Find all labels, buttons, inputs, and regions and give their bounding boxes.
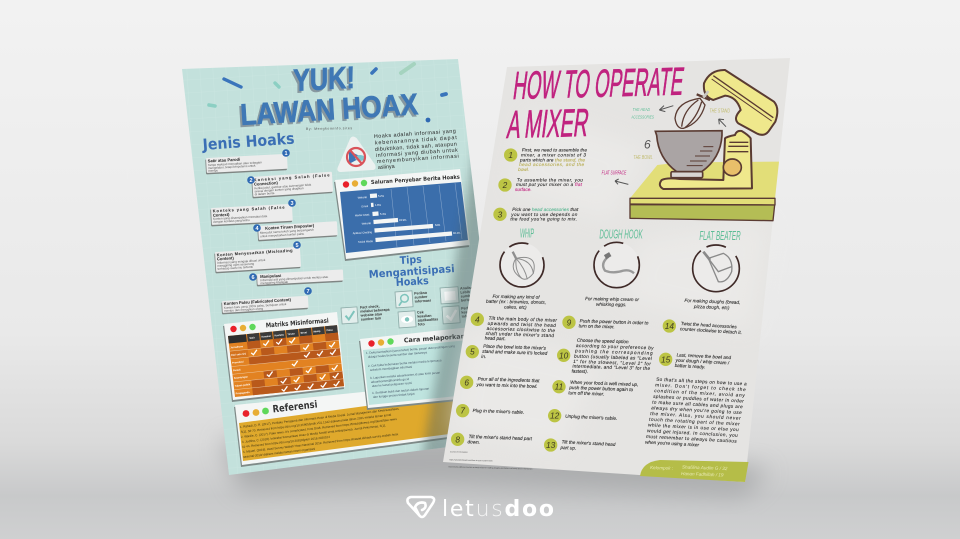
text: definition of hoax: kebenarannya tidak dapat <box>375 135 457 146</box>
tip: check: keaslian <box>461 310 476 315</box>
step 15: 15 <box>661 354 671 364</box>
conclusion text: touch the rotating part of the mixer <box>649 417 741 426</box>
conclusion text: condition of the mixer, avoid any <box>654 388 746 398</box>
step 4: upwards and twist the head <box>487 321 557 328</box>
card 1: Satir atau Parodi: mengelabui, tetapi berpotensi untuk <box>208 164 256 170</box>
wordmark: letusdoo <box>442 497 554 522</box>
text: definition of hoax: Hoaks adalah informasi yang <box>374 129 456 140</box>
step 11: push the power button again to <box>569 385 634 392</box>
group credit banner: Shafilina Audiin G / 32 <box>682 465 728 471</box>
card 5: Konten Menyesatkan: Content) <box>217 255 235 261</box>
step 15: batter is ready. <box>674 363 706 369</box>
matrix table <box>228 325 344 397</box>
conclusion text: must remember to always be cautious <box>646 434 738 444</box>
step 13: 13 <box>546 440 556 450</box>
step 9 <box>562 316 649 330</box>
step 10: 10 <box>559 350 569 360</box>
badge 3 <box>288 199 296 207</box>
text: definition of hoax: informasi yang diubah untuk <box>376 148 458 159</box>
step 8: Tilt the mixer's stand head part <box>468 434 533 441</box>
step 10: according to your preference by <box>576 343 655 350</box>
card 2: Koneksi yang Salah: Koneksi yang Salah (False <box>254 172 330 182</box>
bar chart: Media Cetak <box>355 212 370 217</box>
conclusion text: while the mixer is in use or else you <box>648 422 740 432</box>
card 5: Konten Menyesatkan: Informasi yang sengaja dibuat untuk <box>217 258 266 265</box>
step 3: Pick one head accessories that <box>512 207 579 212</box>
labels and arrows: FLAT SURFACE <box>602 171 627 177</box>
conclusion text: splashes or puddles of water in order <box>653 394 745 404</box>
accessory headings: DOUGH HOOK <box>599 227 643 242</box>
labels and arrows: THE BOWL <box>633 155 653 161</box>
heading: Tips Mengantisipasi Hoaks: Tips <box>399 254 422 267</box>
steps box: atau ke kanal pelaporan resmi <box>372 381 412 388</box>
captions: pizza dough, etc) <box>693 304 730 310</box>
title: How to Operate a Mixer: A MIXER <box>505 101 592 147</box>
card 2: Koneksi yang Salah <box>251 172 333 198</box>
tip: analisa: Lebih dari <box>460 289 478 295</box>
card 2: Koneksi yang Salah: Ketika judul, gambar atau keterangan tidak <box>254 183 312 190</box>
card 4: Konten Tiruan: Mencatut nama tokoh yang berpengaruh <box>260 228 314 235</box>
step 13: Tilt the mixer's stand head <box>561 439 616 447</box>
card 2: Koneksi yang Salah: di dalam berita <box>255 191 275 196</box>
title: Yuk! Lawan Hoax <box>237 60 419 134</box>
step 3 <box>493 207 579 222</box>
panel: Saluran Penyebar Berita Hoaks <box>334 169 470 261</box>
icon: whip <box>500 243 544 287</box>
captions: whisking eggs. <box>596 302 627 307</box>
tip: check: informasi <box>462 314 478 319</box>
card 2: Koneksi yang Salah: Connection) <box>254 180 279 187</box>
tip: cek keaslian: alat/kualitas <box>418 317 438 323</box>
text: definition of hoax: aslinya <box>378 164 395 171</box>
illustration: stand mixer <box>602 70 779 221</box>
matrix table: Manip <box>313 330 321 333</box>
step 4: shaft under the mixer's stand <box>485 331 555 338</box>
step 15 <box>659 352 732 371</box>
tip: periksa sumber: informasi <box>415 299 431 304</box>
step 4: 4 <box>475 314 480 324</box>
tip: check: Perhatikan <box>461 305 480 311</box>
group credit banner: Kelompok : <box>650 465 674 471</box>
step 3: you want to use depends on <box>511 212 578 217</box>
text: definition of hoax: dibuktikan, tidak sah, ataupun <box>375 142 457 153</box>
bar chart: 92.4% <box>453 231 461 235</box>
conclusion text: would get injured. In conclusion, you <box>647 428 739 438</box>
steps box: 1. Dokumentasikan (screenshot) berita, pesan atau postingan yang <box>366 344 455 355</box>
sources: https://www.wikihow.com/use-a-stand-mixer-for-making-doughs-and-batters-at-home-and-in-the-kitchen <box>449 465 532 471</box>
card 5: Konten Menyesatkan: terhadap suatu isu tertentu <box>217 265 254 271</box>
references list: 4. Mastel. (2019). Hasil Survey Wabah Hoax Nasional 2019. Retrieved from https://mastel.id/hasil-survey-wabah-hoax <box>243 432 399 454</box>
conclusion text: when you're using a mixer <box>645 440 700 447</box>
text: definition of hoax: menyembunyikan informasi <box>377 154 459 165</box>
card 6: Manipulasi: menggiring khalayak <box>260 280 289 285</box>
badge 2: 2 <box>249 178 253 184</box>
steps box: dan tunggu proses tindak lanjut <box>373 392 415 399</box>
title: Yuk! Lawan Hoax: YUK! <box>293 60 355 98</box>
text: definition of hoax <box>374 129 459 171</box>
step 5: stand and make sure it's locked <box>482 349 548 356</box>
step 6: Pour all of the ingredients that <box>477 376 541 383</box>
step 10: pushing the corresponding <box>575 348 654 356</box>
bar chart: Email <box>361 204 368 208</box>
bar chart: Aplikasi Chatting <box>353 230 373 235</box>
card 1: Satir atau Parodi: Tanpa maksud merugikan atau sebagian <box>208 160 262 167</box>
card 4: Konten Tiruan: Konten Tiruan (Impostor) <box>265 223 315 231</box>
card 3: Konteks yang Salah: Context) <box>213 212 230 218</box>
badge 5: 5 <box>295 243 299 249</box>
steps box <box>363 340 462 405</box>
card 7: Konten Palsu: menipu dan merugikan orang <box>224 306 264 313</box>
badge 7 <box>304 287 312 295</box>
tip: fact check: Fact check, <box>360 304 380 310</box>
labels and arrows: THE HEAD <box>633 107 650 113</box>
matrix table: Tujuan politik <box>235 383 251 388</box>
badge 6: 6 <box>251 275 255 281</box>
step 1: bowl. <box>518 167 530 172</box>
step 9: 9 <box>567 317 572 327</box>
step 11: turn off the mixer. <box>568 390 605 397</box>
card 6: Manipulasi: Manipulasi <box>260 273 281 279</box>
step 5: 5 <box>470 347 475 357</box>
panel: Referensi <box>234 392 453 467</box>
panel title: Matriks Misinformasi <box>266 317 329 329</box>
sources: https://www.kitchenaid.com/how-to-use-a-stand-mixer <box>449 458 493 462</box>
title: Yuk! Lawan Hoax: LAWAN HOAX <box>237 90 417 134</box>
step 6: 6 <box>464 377 469 387</box>
group credit banner: Hanan Fadhillah / 19 <box>681 471 724 477</box>
steps box: sebelum membagikan informasi <box>370 365 413 372</box>
step 2: surface. <box>515 187 532 192</box>
tip: fact check: website atau <box>359 312 382 318</box>
card 1: Satir atau Parodi: Satir atau Parodi <box>208 157 240 163</box>
badge 7: 7 <box>306 289 310 295</box>
poster: How to Operate a Mixer: HOW TO OPERATE <box>511 60 687 108</box>
bar chart: Website <box>358 195 368 200</box>
tip: analisa: berita <box>461 298 472 303</box>
poster: Yuk! Lawan Hoax <box>182 59 480 475</box>
step 15: Last, remove the bowl and <box>676 352 732 360</box>
counter <box>630 162 779 221</box>
logo: letusdoo <box>407 497 554 522</box>
tip: cek keaslian: foto <box>418 322 426 327</box>
step 14: Twist the head accessories <box>680 321 738 329</box>
card 3: Konteks yang Salah: dengan konteks yang keliru <box>213 218 250 224</box>
step 3: the food you're going to mix. <box>510 217 578 222</box>
panel title: Cara melaporkan Hoaks <box>404 331 490 344</box>
references list: 1. Rahadi, D. R. (2017). Perilaku Pengguna dan Informasi Hoax di Media Sosial. Jurnal Manajemen dan Kewirausahaan, <box>240 407 400 429</box>
step 10: 1" for the slowest, "Level 2" for <box>573 359 652 366</box>
step 9: Push the power button in order to <box>579 318 649 325</box>
step 4: Tilt the main body of the mixer <box>488 316 558 323</box>
badge 6 <box>249 273 257 281</box>
bar chart: Social Media <box>358 239 374 244</box>
captions <box>486 294 740 310</box>
tip: cek keaslian <box>398 309 439 328</box>
step 14: 14 <box>665 321 674 331</box>
card 5: Konten Menyesatkan <box>214 247 301 273</box>
conclusion text: always dry when you're going to use <box>651 405 743 415</box>
step 11 <box>552 380 639 398</box>
badge 1: 1 <box>284 151 288 157</box>
captions: For making doughs (bread, <box>684 298 740 305</box>
step 4: accessories clockwise to the <box>486 326 556 333</box>
tip: periksa sumber <box>395 290 431 308</box>
step 1: mixer, a mixer consist of 3 <box>521 153 587 157</box>
shade cast by right poster <box>418 152 480 450</box>
step 2: 2 <box>502 180 508 190</box>
bar chart: 5.2% <box>378 194 385 198</box>
badge 4: 4 <box>255 226 259 232</box>
step 5: in. <box>481 354 487 359</box>
step 12: 12 <box>550 411 560 421</box>
step 13: part up. <box>560 445 577 451</box>
icon: flat beater <box>693 245 739 292</box>
references list <box>239 401 453 461</box>
badge 4 <box>253 224 261 232</box>
matrix table: Satir <box>249 336 255 340</box>
matrix table: Koneksi <box>261 335 271 339</box>
heading: Tips Mengantisipasi Hoaks <box>368 254 455 289</box>
window dots <box>343 180 367 188</box>
step 7: 7 <box>460 406 465 416</box>
step 7 <box>456 404 525 417</box>
bar chart <box>340 182 468 253</box>
poster shadows <box>220 430 770 495</box>
bowl <box>655 131 722 178</box>
labels and arrows: 6 <box>644 137 651 151</box>
bar chart: 62% <box>435 223 441 227</box>
matrix table: Sesat <box>300 331 307 335</box>
step 10 <box>557 338 656 376</box>
step 5 <box>466 344 549 361</box>
references list: 31-44. Retrieved from https://doi.org/10.30818/jpkm.2018.2030104 <box>242 435 330 449</box>
step 10: Choose the speed option <box>576 338 629 344</box>
step 2: To assemble the mixer, you <box>516 177 584 182</box>
matrix table: Konteks <box>274 333 285 337</box>
card 3: Konteks yang Salah: Konteks yang Salah (False <box>213 205 285 213</box>
conclusion text: mixer. Don't forget to check the <box>655 382 747 392</box>
step 7: Plug in the mixer's cable. <box>472 408 525 415</box>
step 9: turn on the mixer. <box>578 323 615 329</box>
conclusion text <box>645 377 748 449</box>
steps box: 4. Sertakan bukti dan tautan dalam laporan <box>372 386 430 395</box>
accessory headings <box>520 226 741 243</box>
card 3: Konteks yang Salah <box>210 204 293 226</box>
step 1: head accessories, and the <box>519 162 585 167</box>
poster: How to Operate a Mixer <box>443 58 790 482</box>
step 14 <box>663 319 743 335</box>
bar chart: 34.9% <box>399 218 407 222</box>
title: Yuk! Lawan Hoax: LAWAN HOAX <box>239 88 419 132</box>
icon: logo mark <box>407 497 434 517</box>
step 10: intermediate, and "Level 3" for the <box>572 364 651 371</box>
card 3: Konteks yang Salah: Konten yang disampaikan memakai data <box>213 214 268 221</box>
step 15: your dough / whip cream / <box>675 358 730 365</box>
step 2 <box>498 177 584 192</box>
step 1 <box>504 148 588 172</box>
matrix table: Palsu <box>326 329 334 332</box>
heading: Tips Mengantisipasi Hoaks: Mengantisipasi <box>368 263 455 281</box>
badge 1 <box>282 149 290 157</box>
tip: cek keaslian: keaslian <box>417 314 432 319</box>
step 6: you want to mix into the bowl. <box>476 382 538 389</box>
step 10: fastest). <box>571 369 589 374</box>
heading: Jenis Hoaks: Jenis Hoaks <box>201 130 295 154</box>
matrix table: Propaganda <box>235 391 250 395</box>
panel: Cara melaporkan Hoaks <box>359 328 465 410</box>
card 4: Konten Tiruan: untuk menyebarkan konten palsu <box>260 232 305 238</box>
group credit banner <box>640 460 748 482</box>
card 7: Konten Palsu: Konten Palsu (Fabricated Content) <box>224 297 292 306</box>
window dots <box>368 338 394 347</box>
step 8 <box>451 433 533 447</box>
sources: Source of information: <box>450 450 468 454</box>
captions: For making whip cream or <box>585 296 639 302</box>
card 1: Satir atau Parodi <box>205 154 288 174</box>
references list: 3. Juditha, C. (2018). Interaksi Komunikasi Hoax di Media Sosial serta Antisipasinya. Jurnal Pekommas, 3(1), <box>242 423 386 444</box>
captions: For making any kind of <box>492 294 540 300</box>
title: How to Operate a Mixer <box>505 60 687 147</box>
steps 1-3 <box>493 148 588 222</box>
tip: cek keaslian: Cek <box>417 310 424 315</box>
matrix table: Provokasi <box>232 360 244 365</box>
captions: cakes, etc) <box>504 304 527 310</box>
step 1: 1 <box>508 150 513 160</box>
tip: periksa sumber: Periksa <box>414 291 428 296</box>
steps box: 2. Cek fakta kebenaran berita melalui media terpercaya <box>368 358 442 368</box>
tip: analisa <box>440 285 478 304</box>
panel title: Saluran Penyebar Berita Hoaks <box>371 175 460 186</box>
bar chart: 1.8% <box>375 203 382 207</box>
references list: 5(1), 58-70. Retrieved from https://doi.org/10.26905/jmdk.v5i1.1342 diakses pada tahun 2021 melalui laman jurnal <box>241 413 392 434</box>
step 11: 11 <box>555 382 563 392</box>
step 10: button (usually labeled as "Level <box>574 354 652 361</box>
step 2: must put your mixer on a flat <box>516 182 583 187</box>
card 1: Satir atau Parodi: menipu <box>208 168 218 173</box>
mixer head <box>660 70 777 189</box>
step 3: 3 <box>498 209 503 219</box>
card 6: Manipulasi <box>256 269 344 286</box>
step 6 <box>460 376 541 389</box>
card 2: Koneksi yang Salah: sesuai dengan konten yang disajikan <box>254 186 304 193</box>
captions: batter (ex : brownies, donuts, <box>486 299 546 305</box>
step 13 <box>544 438 616 453</box>
references list: 2. Wardle, C. (2017). Fake news. It's complicated. First Draft. Retrieved from https://firstdraftnews.org/latest/fake-news <box>241 417 397 439</box>
step 8: down. <box>467 439 481 445</box>
step 11: When your food is well mixed up, <box>570 380 639 387</box>
card 5: Konten Menyesatkan: Konten Menyesatkan (Misleading <box>217 248 293 257</box>
bar chart: Website <box>362 221 372 226</box>
badge 3: 3 <box>290 201 294 207</box>
tip: analisa: sumber <box>461 294 474 299</box>
panel: Matriks Misinformasi <box>223 312 345 402</box>
tip: fact check <box>341 304 391 324</box>
panel title: Referensi <box>272 399 318 415</box>
sources <box>449 450 532 471</box>
body details <box>723 142 748 176</box>
step 1: parts which are the stand, the <box>520 157 586 162</box>
matrix table: Dari satu sisi <box>231 352 247 357</box>
byline: By: Mengkominfo.sites <box>306 126 353 131</box>
paper texture <box>450 110 770 450</box>
card 7: Konten Palsu: Konten baru yang 100% palsu, bertujuan untuk <box>224 302 287 310</box>
badge 2 <box>247 176 255 184</box>
icon: dough hook <box>594 242 639 288</box>
tip: check <box>442 304 480 324</box>
matrix table: Keuntungan <box>234 375 249 380</box>
labels and arrows: THE STAND <box>709 108 730 114</box>
steps box: diduga hoaks beserta sumber dan tautannya <box>368 350 428 359</box>
whip <box>675 91 710 128</box>
step 5: Place the bowl into the mixer's <box>483 344 547 351</box>
confetti decoration <box>209 64 446 122</box>
tip: periksa sumber: sumber <box>414 295 428 300</box>
matrix table: Tiruan <box>287 332 295 336</box>
icon: no hoax warning triangle <box>338 138 375 171</box>
step 12: Unplug the mixer's cable. <box>565 414 618 421</box>
title: Yuk! Lawan Hoax: YUK! <box>291 62 353 100</box>
labels and arrows <box>602 107 730 177</box>
step 4 <box>471 313 558 343</box>
tip: fact check: melalui beberapa <box>360 308 391 314</box>
steps box: aduankonten@kominfo.go.id <box>371 377 410 384</box>
card 5: Konten Menyesatkan: menggiring opini seseorang <box>217 262 255 268</box>
step 8: 8 <box>455 434 460 444</box>
step 12 <box>548 409 618 422</box>
heading: Tips Mengantisipasi Hoaks: Hoaks <box>395 275 429 289</box>
tip: fact check: sumber lain <box>361 316 381 322</box>
matrix table: Jurnalisme <box>230 345 244 349</box>
badge 5 <box>293 241 301 249</box>
step 14: counter clockwise to detach it. <box>680 326 742 335</box>
matrix table: Parodi <box>233 369 241 372</box>
step 1: First, we need to assemble the <box>521 148 588 153</box>
window dots <box>243 408 269 417</box>
step 4: head part. <box>484 336 506 341</box>
references list: nasional-2019/ diakses melalui laman resmi organisasi <box>243 447 316 459</box>
poster: How to Operate a Mixer: FLAT BEATER <box>699 228 741 243</box>
bar chart: 5.4% <box>380 212 387 216</box>
conclusion text: the mixer. Also, you should never <box>650 411 742 421</box>
tip: analisa: Analisa <box>460 286 474 291</box>
accessories and lower steps <box>449 242 748 471</box>
accessory headings: WHIP <box>520 226 534 241</box>
conclusion text: So that's all the steps on how to use a <box>656 377 748 386</box>
steps box: 3. Laporkan melalui aduankonten.id atau kirim pesan <box>370 370 441 380</box>
window dots <box>230 324 256 332</box>
labels and arrows: ACCESSORIES <box>631 114 654 120</box>
card 7: Konten Palsu <box>221 296 309 314</box>
card 4: Konten Tiruan <box>257 221 338 241</box>
card 6: Manipulasi: Informasi asli yang dimanipulasi untuk menipu atau <box>260 275 329 282</box>
conclusion text: to make sure all cables and plugs are <box>652 400 744 409</box>
